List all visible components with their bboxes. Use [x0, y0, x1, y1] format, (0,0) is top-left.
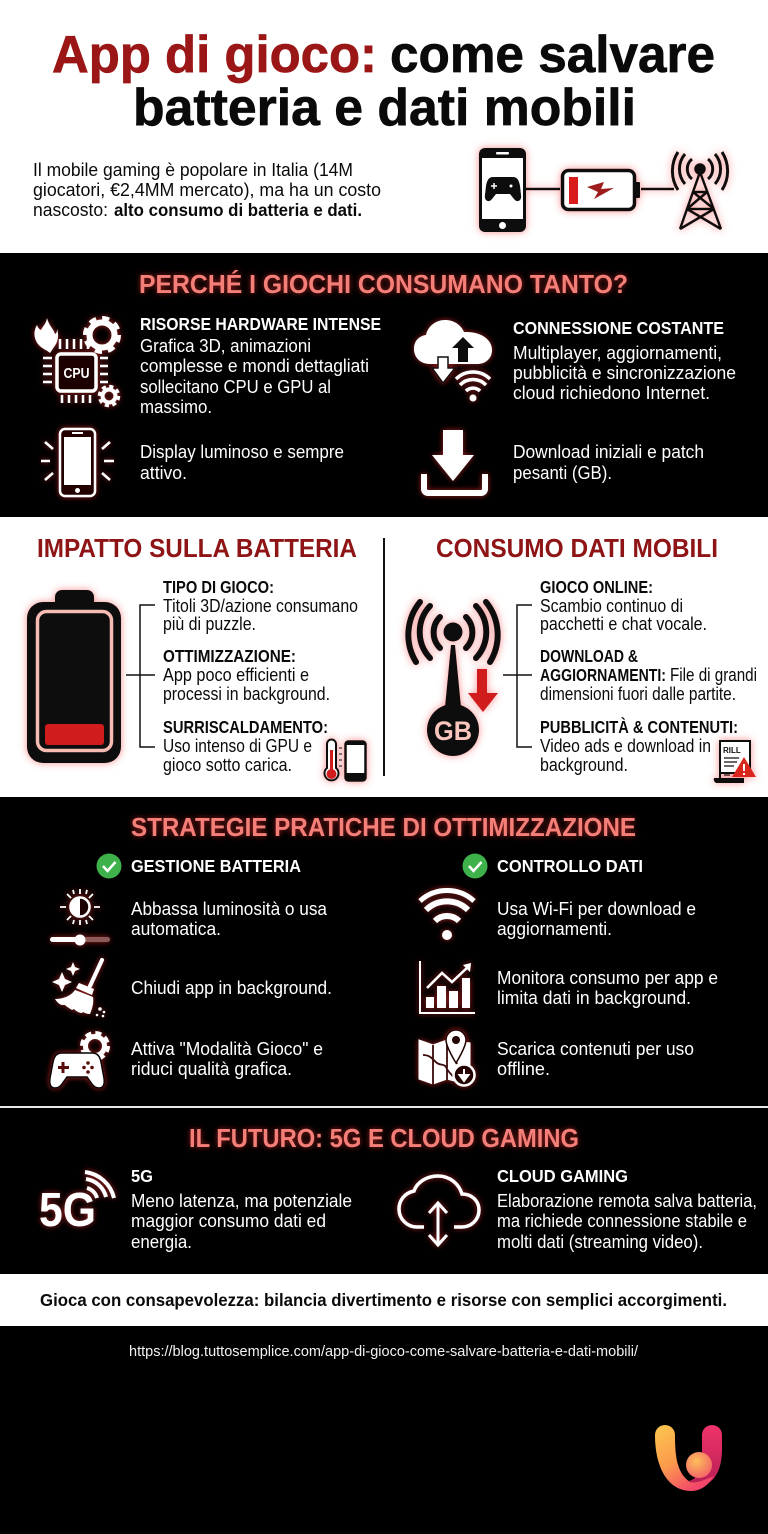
text: display: attivo. — [140, 463, 187, 483]
icon: cloud gaming — [399, 1176, 479, 1245]
text: abbassa: automatica. — [131, 919, 221, 939]
heading: PERCHÉ I GIOCHI CONSUMANO TANTO? — [139, 270, 628, 299]
subheading: controllo dati: CONTROLLO DATI — [497, 856, 643, 876]
icon: chart — [420, 961, 475, 1013]
text: risorse hardware: sollecitano CPU e GPU al — [140, 377, 331, 397]
icon: broom — [52, 960, 105, 1017]
panel: strategie — [0, 797, 768, 1106]
title: come salvare — [390, 26, 715, 84]
text: download: Download iniziali e patch — [513, 442, 704, 462]
text: 5G: energia. — [131, 1232, 192, 1252]
icon: antenna tower — [672, 152, 728, 229]
title: App di gioco: — [52, 26, 377, 84]
text: cloud gaming: CLOUD GAMING — [497, 1166, 628, 1186]
text: cloud gaming — [497, 1166, 757, 1252]
intro text: nascosto: — [33, 200, 108, 220]
text: batteria details: Titoli 3D/azione consumano — [163, 596, 358, 616]
text: connessione costante: pubblicità e sincronizzazione — [513, 363, 736, 383]
text: attiva: Attiva "Modalità Gioco" e — [131, 1039, 323, 1059]
text: wifi: aggiornamenti. — [497, 919, 612, 939]
heading: IL FUTURO: 5G E CLOUD GAMING — [189, 1125, 579, 1153]
text: dati details: dimensioni fuori dalle partite. — [540, 684, 736, 704]
text: abbassa: Abbassa luminosità o usa — [131, 899, 328, 919]
text: 5G: 5G — [131, 1166, 153, 1186]
text: connessione costante — [513, 318, 736, 403]
text: scarica: offline. — [497, 1059, 550, 1079]
text: chiudi: Chiudi app in background. — [131, 978, 332, 998]
text: risorse hardware — [140, 314, 381, 417]
icon: bill warning — [714, 741, 756, 783]
icon: low battery with bolt — [562, 170, 640, 210]
heading: STRATEGIE PRATICHE DI OTTIMIZZAZIONE — [131, 814, 636, 842]
bracket: batteria — [126, 605, 155, 747]
title: batteria e dati mobili — [133, 79, 636, 137]
icon: battery — [27, 590, 121, 763]
icon: cpu with flame and gears — [34, 318, 118, 406]
text: dati details: GIOCO ONLINE: — [540, 577, 653, 597]
text: batteria details: più di puzzle. — [163, 614, 256, 634]
text: batteria details: App poco efficienti e — [163, 665, 309, 685]
text: connessione costante: cloud richiedono Internet. — [513, 383, 710, 403]
text: cloud gaming: ma richiede connessione stabile e — [497, 1211, 747, 1231]
source url: https://blog.tuttosemplice.com/app-di-gioco-come-salvare-batteria-e-dati-mobili/ — [129, 1344, 639, 1360]
icon: phone, battery and tower chain — [479, 148, 728, 232]
text: dati details: Video ads e download in — [540, 736, 711, 756]
icon: 5G: 5G — [39, 1184, 96, 1237]
icon: cloud with arrows and wifi — [414, 320, 492, 402]
text: abbassa — [131, 899, 328, 939]
icon: gamepad with gear — [50, 1033, 108, 1088]
intro text: Il mobile gaming è popolare in Italia (14M — [33, 160, 353, 180]
text: wifi: Usa Wi-Fi per download e — [497, 899, 696, 919]
text: batteria details: Uso intenso di GPU e — [163, 736, 312, 756]
icon: check gestione — [96, 854, 122, 878]
text: dati details: Scambio continuo di — [540, 596, 683, 616]
icon: signal tower GB: GB — [434, 716, 472, 746]
icon: signal tower GB — [408, 602, 498, 756]
text: dati details: pacchetti e chat vocale. — [540, 614, 707, 634]
text: batteria details — [163, 577, 358, 775]
text: scarica: Scarica contenuti per uso — [497, 1039, 694, 1059]
text: dati details: background. — [540, 755, 628, 775]
text: display: Display luminoso e sempre — [140, 442, 344, 462]
text: connessione costante: Multiplayer, aggiornamenti, — [513, 343, 722, 363]
text: batteria details: TIPO DI GIOCO: — [163, 577, 274, 597]
closing band: Gioca con consapevolezza: bilancia divertimento e risorse con semplici accorgimenti. — [40, 1290, 727, 1310]
text: risorse hardware: massimo. — [140, 397, 212, 417]
icon: thermometer and phone — [325, 740, 366, 781]
text: monitora: limita dati in background. — [497, 988, 691, 1008]
panel: perché i giochi consumano — [0, 253, 768, 517]
text: dati details: DOWNLOAD & — [540, 646, 638, 666]
text: 5G — [131, 1166, 352, 1252]
text: risorse hardware: RISORSE HARDWARE INTENSE — [140, 314, 381, 334]
text: batteria details: SURRISCALDAMENTO: — [163, 717, 328, 737]
text: attiva: riduci qualità grafica. — [131, 1059, 292, 1079]
logo — [655, 1425, 722, 1491]
header background — [0, 0, 768, 253]
intro text: alto consumo di batteria e dati. — [114, 200, 362, 220]
icon: bright phone — [41, 429, 114, 496]
icon: phone with gamepad — [479, 148, 526, 232]
text: wifi — [497, 899, 696, 939]
subheading: gestione batteria: GESTIONE BATTERIA — [131, 856, 301, 876]
heading: impatto batteria: IMPATTO SULLA BATTERIA — [37, 535, 357, 563]
icon: bill warning: RILL — [723, 746, 741, 755]
text: connessione costante: CONNESSIONE COSTANTE — [513, 318, 724, 338]
closing band — [0, 1274, 768, 1326]
icon: check controllo — [462, 854, 488, 878]
text: risorse hardware: Grafica 3D, animazioni — [140, 336, 311, 356]
text: dati details: AGGIORNAMENTI: — [540, 665, 666, 685]
icon: map with pin — [419, 1030, 474, 1086]
text: 5G: maggior consumo dati ed — [131, 1211, 326, 1231]
panel: il futuro — [0, 1108, 768, 1274]
icon: brightness — [50, 889, 110, 946]
icon: cpu with flame and gears: CPU — [64, 366, 90, 382]
intro text — [33, 160, 381, 220]
text: batteria details: OTTIMIZZAZIONE: — [163, 646, 296, 666]
text: display — [140, 442, 344, 483]
panel: impatto e consumo — [0, 517, 768, 797]
text: batteria details: processi in background. — [163, 684, 330, 704]
text: scarica — [497, 1039, 694, 1079]
title — [52, 26, 715, 137]
text: download: pesanti (GB). — [513, 463, 612, 483]
text: risorse hardware: complesse e mondi dettagliati — [140, 356, 369, 376]
text: batteria details: gioco sotto carica. — [163, 755, 292, 775]
bracket: dati — [503, 605, 532, 747]
text: cloud gaming: molti dati (streaming video). — [497, 1232, 703, 1252]
text: 5G: Meno latenza, ma potenziale — [131, 1191, 352, 1211]
intro text: giocatori, €2,4MM mercato), ma ha un costo — [33, 180, 381, 200]
text: monitora: Monitora consumo per app e — [497, 968, 718, 988]
text: dati details — [540, 577, 757, 775]
icon: download — [424, 430, 485, 493]
text: attiva — [131, 1039, 323, 1079]
text: monitora — [497, 968, 718, 1008]
icon: 5G — [39, 1172, 114, 1237]
heading: consumo dati: CONSUMO DATI MOBILI — [436, 535, 718, 563]
icon: wifi — [420, 891, 474, 940]
text: download — [513, 442, 704, 483]
